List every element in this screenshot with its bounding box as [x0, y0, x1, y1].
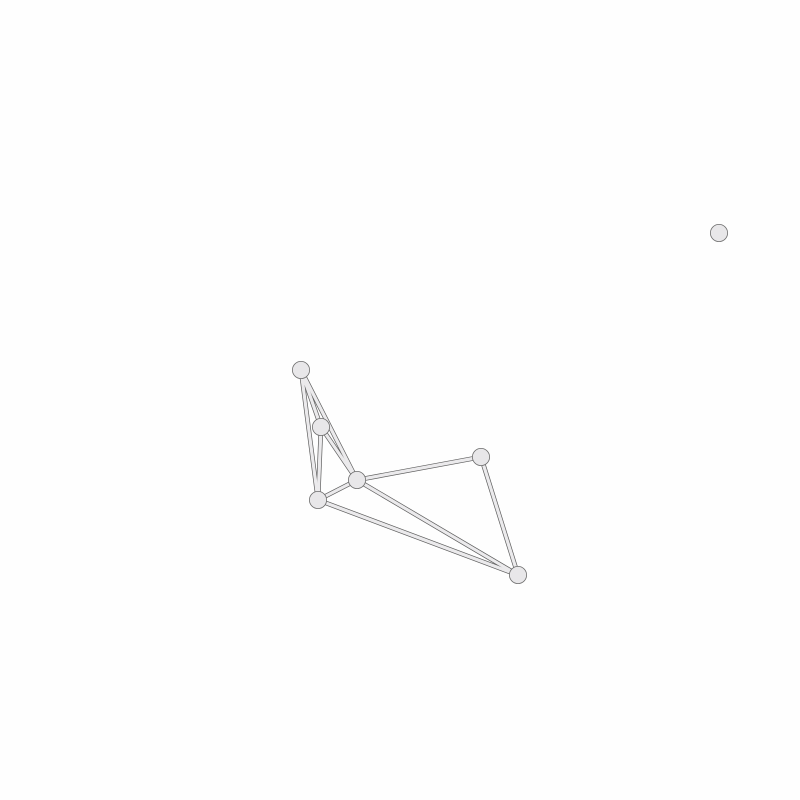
graph nodes [292, 224, 728, 584]
edge fills [301, 370, 518, 575]
edge outlines [301, 370, 518, 575]
